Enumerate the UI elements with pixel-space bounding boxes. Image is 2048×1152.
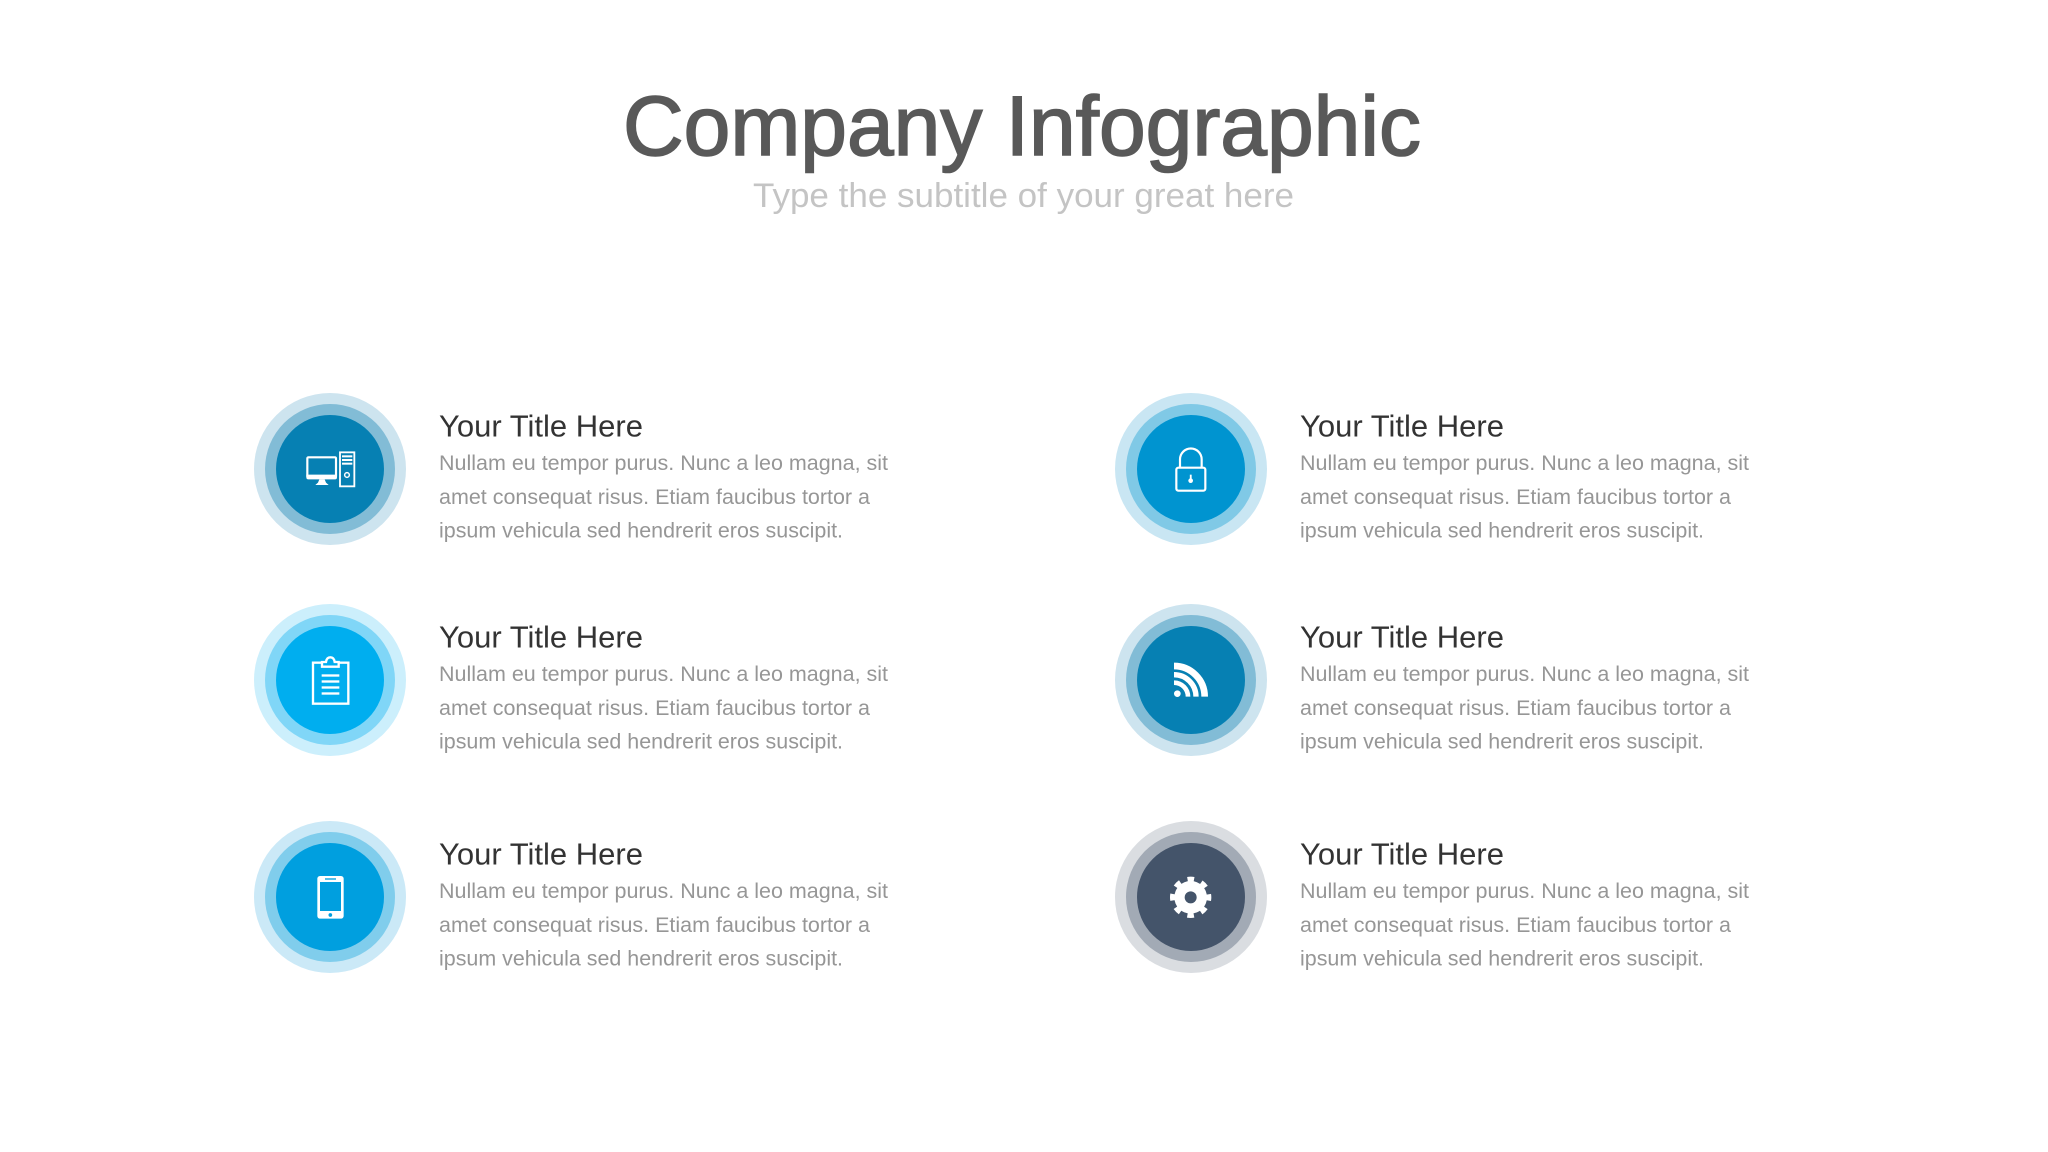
text: item 6: Nullam eu tempor purus. Nunc a leo magna, sit bbox=[1300, 879, 1749, 903]
text: item 6: Your Title Here bbox=[1300, 836, 1504, 872]
icon: rss bbox=[1174, 666, 1205, 697]
badge: phone bbox=[254, 821, 406, 973]
text: item 6 bbox=[1300, 836, 1749, 970]
icon: phone bbox=[317, 876, 344, 919]
text: item 4: Your Title Here bbox=[1300, 408, 1504, 444]
text: item 2: Nullam eu tempor purus. Nunc a leo magna, sit bbox=[439, 662, 888, 686]
text: item 3: Your Title Here bbox=[439, 836, 643, 872]
panel: item 1 computer bbox=[254, 393, 888, 545]
text: item 3 bbox=[439, 836, 888, 970]
text: item 5 bbox=[1300, 620, 1749, 754]
icon: computer bbox=[306, 452, 354, 486]
text: item 1: Nullam eu tempor purus. Nunc a leo magna, sit bbox=[439, 451, 888, 475]
text: item 2: Your Title Here bbox=[439, 620, 643, 654]
panel: item 6 gear bbox=[1115, 821, 1749, 973]
icon: clipboard bbox=[313, 657, 348, 704]
text: item 4: ipsum vehicula sed hendrerit eros suscipit. bbox=[1300, 518, 1704, 542]
text: item 5: ipsum vehicula sed hendrerit eros suscipit. bbox=[1300, 730, 1704, 754]
text: item 5: amet consequat risus. Etiam faucibus tortor a bbox=[1300, 696, 1731, 720]
panel: item 4 lock bbox=[1115, 393, 1749, 545]
text: item 4: amet consequat risus. Etiam faucibus tortor a bbox=[1300, 485, 1731, 509]
text: item 6: ipsum vehicula sed hendrerit eros suscipit. bbox=[1300, 946, 1704, 970]
title: Company Infographic bbox=[623, 79, 1421, 173]
badge: computer bbox=[254, 393, 406, 545]
icon: lock bbox=[1176, 449, 1205, 491]
text: item 3: Nullam eu tempor purus. Nunc a leo magna, sit bbox=[439, 879, 888, 903]
text: item 1: Your Title Here bbox=[439, 408, 643, 444]
icon: gear bbox=[1173, 880, 1208, 915]
text: item 3: amet consequat risus. Etiam faucibus tortor a bbox=[439, 913, 870, 937]
text: item 6: amet consequat risus. Etiam faucibus tortor a bbox=[1300, 913, 1731, 937]
badge: rss bbox=[1115, 604, 1267, 756]
text: item 2: ipsum vehicula sed hendrerit eros suscipit. bbox=[439, 730, 843, 754]
subtitle: Type the subtitle of your great here bbox=[753, 177, 1294, 215]
text: item 4: Nullam eu tempor purus. Nunc a leo magna, sit bbox=[1300, 451, 1749, 475]
badge: lock bbox=[1115, 393, 1267, 545]
panel: item 2 clipboard bbox=[254, 604, 888, 756]
panel: item 5 rss bbox=[1115, 604, 1749, 756]
panel: item 3 phone bbox=[254, 821, 888, 973]
text: item 5: Your Title Here bbox=[1300, 620, 1504, 654]
text: item 3: ipsum vehicula sed hendrerit eros suscipit. bbox=[439, 946, 843, 970]
text: item 4 bbox=[1300, 408, 1749, 542]
text: item 1: ipsum vehicula sed hendrerit eros suscipit. bbox=[439, 518, 843, 542]
text: item 2: amet consequat risus. Etiam faucibus tortor a bbox=[439, 696, 870, 720]
text: item 5: Nullam eu tempor purus. Nunc a leo magna, sit bbox=[1300, 662, 1749, 686]
text: item 2 bbox=[439, 620, 888, 754]
text: item 1 bbox=[439, 408, 888, 542]
text: item 1: amet consequat risus. Etiam faucibus tortor a bbox=[439, 485, 870, 509]
badge: clipboard bbox=[254, 604, 406, 756]
badge: gear bbox=[1115, 821, 1267, 973]
